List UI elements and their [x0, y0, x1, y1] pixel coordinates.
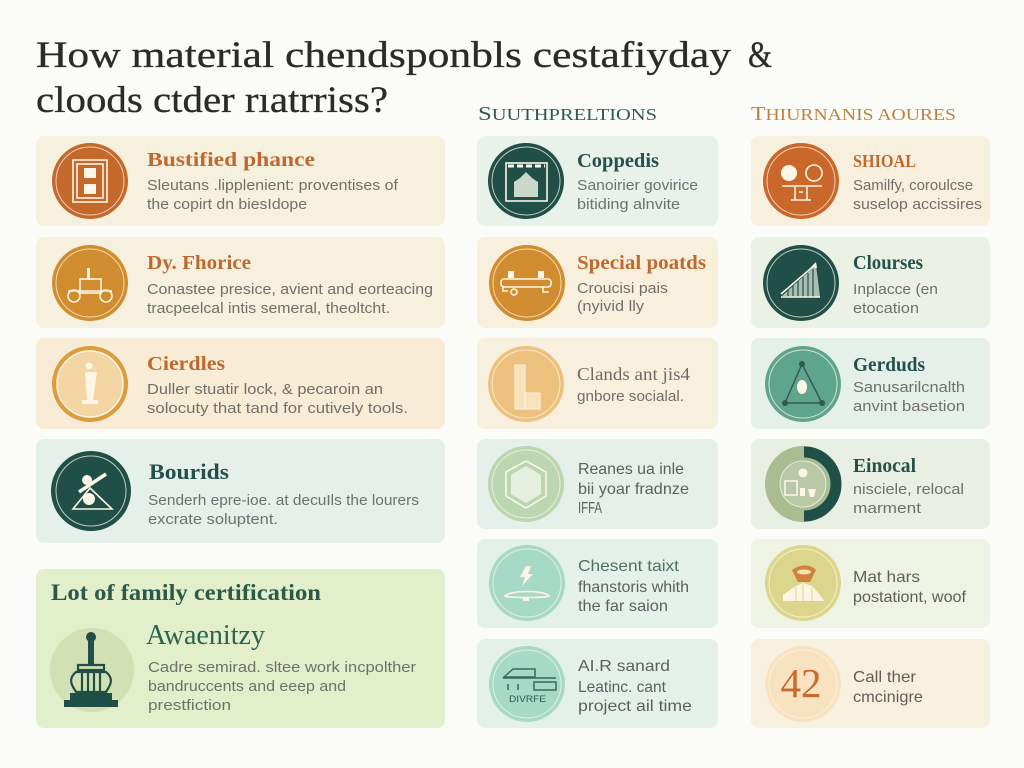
icon: cart: [52, 245, 128, 321]
panel: Coppedis: [477, 136, 718, 226]
heading and description: Bourids: [149, 459, 229, 484]
heading and description: suselop accissires: [853, 196, 982, 213]
description: AI.R sanard: [578, 658, 670, 675]
heading and description: Senderh epre-ioe. at decuIls the lourers: [148, 492, 419, 509]
title: cloods ctder rıatrriss?: [36, 80, 388, 121]
heading and description: bitiding alnvite: [577, 196, 680, 213]
icon: framed document: [52, 143, 128, 219]
description: the far saion: [578, 598, 668, 615]
title: &: [748, 35, 772, 76]
heading and description: [148, 459, 419, 528]
heading and description: solocuty that tand for cutively tools.: [147, 400, 408, 417]
heading and description: excrate soluptent.: [148, 511, 278, 528]
description: Call ther: [853, 669, 917, 686]
heading and description: Inplacce (en: [853, 281, 938, 298]
panel: Cierdles: [36, 338, 445, 429]
description: Leatinc. cant: [578, 679, 667, 696]
heading and description: Croucisi pais: [577, 280, 668, 297]
heading and description: [853, 151, 982, 213]
heading and description: Samilfy, coroulcse: [853, 177, 973, 194]
panel: Bustified phance: [36, 136, 445, 226]
heading and description: anvint basetion: [853, 398, 965, 415]
panel: AI.R sanard: [477, 639, 718, 728]
icon: triangle network: [765, 346, 841, 422]
description: Reanes ua inle: [578, 461, 684, 478]
heading and description: [853, 455, 964, 517]
description: [578, 461, 689, 517]
icon: bench: [489, 245, 565, 321]
subheading and description: prestfiction: [148, 697, 231, 714]
heading and description: etocation: [853, 300, 919, 317]
panel: Clourses: [751, 237, 990, 328]
heading and description: Bustified phance: [147, 149, 315, 171]
icon: number 42: 42: [780, 660, 822, 706]
column heading: Suuthpreltions: SUUTHPRELTIONS: [478, 103, 657, 125]
heading and description: Clourses: [853, 252, 923, 274]
panel: Special poatds: [477, 237, 718, 328]
icon: progress ring: [765, 446, 841, 522]
heading and description: marment: [853, 500, 922, 517]
heading and description: Duller stuatir lock, & pecaroin an: [147, 381, 383, 398]
icon: tower: [488, 346, 564, 422]
subheading and description: Awaenitzy: [146, 619, 265, 651]
subheading and description: Cadre semirad. sltee work incpolther: [148, 659, 416, 676]
panel: Dy. Fhorice: [36, 237, 445, 328]
heading and description: [853, 252, 938, 317]
panel heading: Lot of family certification: [51, 580, 321, 606]
description: [578, 658, 692, 715]
column heading: Thiurnanis aoures: THIURNANIS AOURES: [751, 103, 956, 125]
heading and description: Cierdles: [147, 353, 225, 375]
heading and description: [147, 149, 399, 213]
heading and description: Dy. Fhorice: [147, 252, 251, 274]
description: project ail time: [578, 698, 692, 715]
description: IFFA: [578, 500, 602, 517]
icon: vehicle: DIVRFE: [509, 694, 546, 705]
heading and description: [577, 150, 698, 213]
panel: Bourids: [36, 439, 445, 543]
heading and description: Sleutans .lipplenient: proventises of: [147, 177, 399, 194]
title: How material chendsponbls cestafiyday: [36, 35, 732, 76]
panel: Reanes: [477, 439, 718, 529]
description: cmcinigre: [853, 689, 923, 706]
panel: Einocal: [751, 439, 990, 529]
description: [577, 364, 690, 405]
heading and description: [577, 252, 706, 315]
panel: Chesent: [477, 539, 718, 628]
heading and description: Special poatds: [577, 252, 706, 274]
icon: rising chart: [763, 245, 839, 321]
heading and description: SHIOAL: [853, 151, 916, 171]
heading and description: [853, 354, 965, 415]
icon: bowl over bars: [765, 545, 841, 621]
heading and description: Einocal: [853, 455, 916, 477]
icon: hexagon: [488, 446, 564, 522]
description: fhanstoris whith: [578, 579, 689, 596]
heading and description: Gerduds: [853, 354, 925, 376]
icon: monument: [50, 628, 134, 712]
panel: Gerduds: [751, 338, 990, 429]
subheading and description: bandruccents and eeep and: [148, 678, 346, 695]
description: Clands ant jis4: [577, 364, 690, 384]
icon: number 42: [765, 646, 841, 722]
heading and description: Sanusarilcnalth: [853, 379, 965, 396]
heading and description: [147, 353, 408, 417]
description: gnbore socialal.: [577, 388, 684, 405]
description: Chesent taixt: [578, 558, 680, 575]
heading and description: tracpeelcal intis semeral, theoltcht.: [147, 300, 390, 317]
icon: vehicle: [489, 646, 565, 722]
title: [36, 35, 772, 121]
panel: Mat hars: [751, 539, 990, 628]
description: [578, 558, 689, 615]
icon: pedestal: [52, 346, 128, 422]
panel: Call ther: [751, 639, 990, 728]
heading and description: Coppedis: [577, 150, 659, 172]
icon: two circles on stand: [763, 143, 839, 219]
description: Mat hars: [853, 569, 920, 586]
heading and description: (nyivid lly: [577, 298, 644, 315]
icon: triangle and bar: [51, 451, 131, 531]
heading and description: [147, 252, 433, 317]
description: postationt, woof: [853, 589, 967, 606]
icon: bolt on tray: [489, 545, 565, 621]
heading and description: the copirt dn biesIdope: [147, 196, 307, 213]
panel: Shioal: [751, 136, 990, 226]
heading and description: Conastee presice, avient and eorteacing: [147, 281, 433, 298]
description: [853, 669, 923, 706]
panel: Lot of family certification: [36, 569, 445, 728]
icon: building window: [488, 143, 564, 219]
description: [853, 569, 967, 606]
subheading and description: [146, 619, 416, 714]
heading and description: nisciele, relocal: [853, 481, 964, 498]
panel: Clands ant: [477, 338, 718, 429]
heading and description: Sanoirier govirice: [577, 177, 698, 194]
description: bii yoar fradnze: [578, 481, 689, 498]
